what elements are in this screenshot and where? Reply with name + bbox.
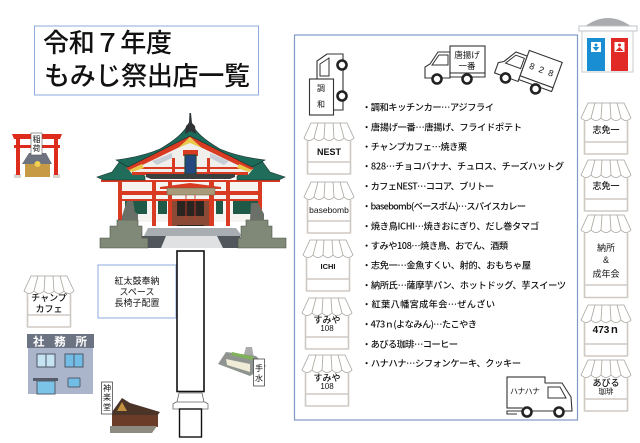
stall: champ cafe: チャンプ — [31, 293, 67, 303]
stall: sumiya 108 second — [302, 355, 352, 406]
list text: ・basebomb(ベースボム)…スパイスカレー — [362, 198, 526, 212]
icon: kagura hall: 楽 — [103, 392, 111, 402]
callout: taiko donation space: 紅太鼓奉納 — [114, 275, 160, 286]
list text: ・調和キッチンカー…アジフライ — [362, 100, 494, 114]
callout: taiko donation space: 長椅子配置 — [114, 297, 160, 308]
shrine name plaque — [185, 155, 196, 174]
list text: ・すみや108…焼き鳥、おでん、酒類 — [362, 238, 508, 252]
stall: shimenichi top: 志免一 — [592, 124, 620, 135]
stall: abiru coffee: あびる — [592, 377, 620, 388]
stall: champ cafe: カフェ — [35, 304, 63, 314]
truck: chowa kitchen car — [310, 54, 346, 115]
icon: temizu water basin: 手 — [255, 363, 263, 373]
stall: shimenichi second: 志免一 — [592, 180, 620, 191]
title box: 令和７年度 — [43, 28, 172, 58]
icon: toilets — [579, 18, 637, 72]
list text: ・あびる珈琲…コーヒー — [362, 336, 458, 350]
icon: inari torii shrine: 稲 — [32, 134, 40, 144]
shrine main roof — [116, 121, 265, 167]
icon: kagura hall: 神 — [103, 383, 111, 393]
callout: taiko donation space: スペース — [120, 287, 154, 297]
stall: shimenichi top — [581, 103, 631, 154]
stall: nosho and seinenkai: 成年会 — [592, 268, 620, 279]
stall: 473n: 473ｎ — [593, 325, 619, 336]
shrine porch roof — [146, 174, 235, 179]
list text: ・チャンプカフェ…焼き栗 — [362, 139, 467, 153]
truck: karaage ichiban: 唐揚げ — [454, 50, 480, 60]
stall: sumiya 108 second: すみや — [313, 373, 341, 383]
icon: kagura hall — [102, 382, 160, 433]
title box — [34, 26, 258, 95]
truck: chowa kitchen car: 調 — [317, 84, 325, 93]
icon: temizu water basin: 水 — [255, 373, 263, 383]
icon: inari torii shrine — [12, 133, 62, 178]
stall: nosho and seinenkai — [581, 215, 631, 298]
shrine left side roof — [97, 161, 145, 180]
shrine left stone base with komainu — [100, 220, 148, 248]
shrine right side roof — [237, 161, 285, 180]
truck: hana hana — [507, 377, 572, 416]
icon: kagura hall: 堂 — [103, 402, 111, 412]
callout: taiko donation space — [98, 265, 176, 318]
shrine front gable — [128, 138, 253, 175]
list text: ・828…チョコバナナ、チュロス、チーズハットグ — [362, 158, 564, 172]
list text: ・カフェNEST…ココア、ブリトー — [362, 178, 494, 192]
stall: sumiya 108: すみや — [313, 315, 341, 325]
truck: chowa kitchen car: 和 — [317, 100, 325, 109]
list text: ・焼き鳥ICHI…焼きおにぎり、だし巻タマゴ — [362, 218, 539, 232]
approach path and gate — [173, 251, 208, 437]
panel: stall list — [294, 35, 578, 420]
shrine white walls — [118, 180, 262, 222]
icon: temizu water basin — [218, 347, 266, 386]
list text: ・志免一…金魚すくい、射的、おもちゃ屋 — [362, 258, 531, 272]
stall: sumiya 108 — [302, 298, 352, 350]
truck: karaage ichiban: 一番 — [458, 61, 476, 71]
list text: ・紅葉八幡宮成年会…ぜんざい — [362, 296, 495, 310]
icon: main shrine building — [97, 113, 286, 248]
title box: もみじ祭出店一覧 — [44, 61, 250, 91]
truck: hana hana: ハナハナ — [510, 387, 540, 396]
list text: ・唐揚げ一番…唐揚げ、フライドポテト — [362, 120, 522, 134]
stall: nosho and seinenkai: & — [603, 255, 609, 265]
icon: inari torii shrine: 荷 — [32, 143, 40, 153]
stall: NEST — [304, 123, 354, 174]
icon: shrine office: 社務所 — [33, 334, 88, 348]
truck: karaage ichiban — [425, 46, 485, 84]
stall: NEST: NEST — [317, 147, 341, 157]
stall: abiru coffee — [581, 360, 631, 412]
stall: 473n — [581, 305, 631, 356]
shrine doorway — [172, 201, 209, 226]
list text: ・ハナハナ…シフォンケーキ、クッキー — [362, 356, 521, 370]
stall: shimenichi second — [581, 160, 631, 212]
icon: shrine office — [27, 334, 94, 394]
stall: ICHI: ICHI — [320, 262, 336, 271]
stall: abiru coffee: 珈琲 — [598, 386, 614, 396]
stall: sumiya 108 second: 108 — [320, 382, 334, 391]
stall: champ cafe — [24, 276, 74, 328]
shrine right stone base with komainu — [238, 220, 286, 248]
truck: 828 — [493, 42, 562, 99]
shrine sacred rope — [167, 188, 215, 195]
list text: ・473ｎ(よなみん)…たこやき — [362, 316, 477, 330]
stall: sumiya 108: 108 — [320, 324, 334, 333]
list text — [362, 100, 566, 370]
shrine red pillars and beams — [101, 180, 280, 226]
stall: ICHI — [303, 240, 353, 292]
list text: ・納所氏…薩摩芋パン、ホットドッグ、芋スイーツ — [362, 278, 566, 292]
truck: 828: 828 — [528, 61, 555, 79]
stall: nosho and seinenkai: 納所 — [597, 242, 615, 253]
stall: basebomb: basebomb — [309, 205, 349, 215]
stall: basebomb — [304, 182, 354, 234]
shrine finial — [185, 113, 196, 134]
shrine steps — [144, 228, 242, 236]
